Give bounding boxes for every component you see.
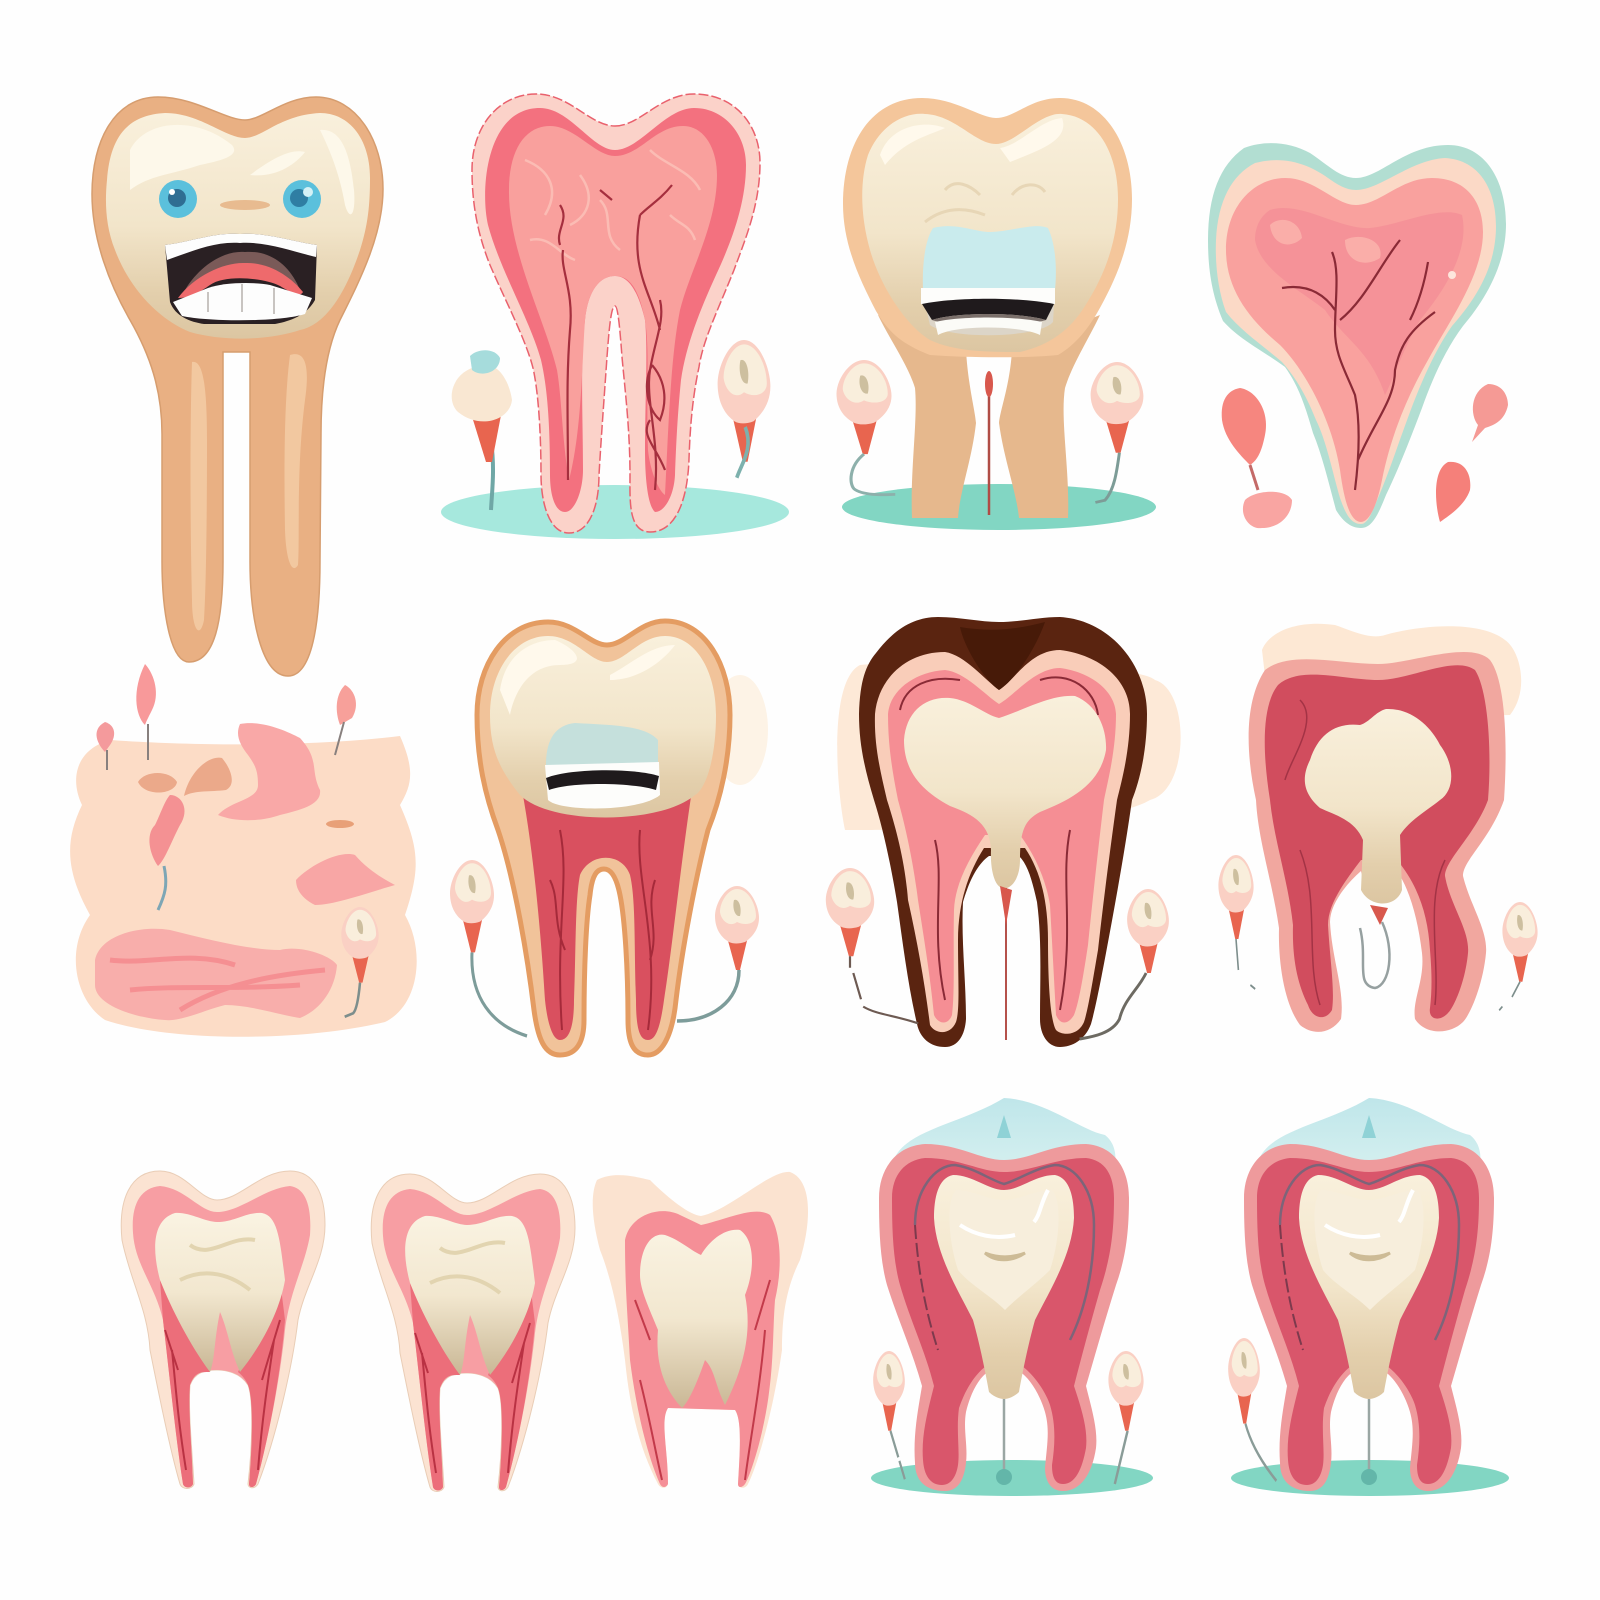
- centre root canal needle: [988, 375, 990, 515]
- veins: [559, 185, 672, 490]
- pink layer: [625, 1211, 780, 1487]
- pale outer layer: [593, 1172, 808, 1488]
- tooth body: [879, 1098, 1129, 1491]
- right mini tooth: [1499, 902, 1538, 1010]
- crown enamel: [862, 114, 1118, 352]
- left mini tooth: [873, 1351, 905, 1479]
- ice patch: [546, 723, 658, 770]
- cream core: [1305, 709, 1451, 904]
- tooth outline: [477, 621, 730, 1055]
- mottled tissue: [525, 150, 700, 260]
- left mini tooth with cap: [452, 350, 512, 510]
- tooth 1: surprised cartoon tooth with long roots: [92, 97, 383, 676]
- veins: [1282, 240, 1435, 490]
- top pin left: [96, 722, 114, 770]
- cream core: [640, 1230, 752, 1408]
- right mini tooth: [1091, 362, 1143, 502]
- right eye: [283, 180, 321, 218]
- large pink tissue: [95, 929, 337, 1020]
- brown outer shell: [859, 617, 1147, 1047]
- ground ellipse: [1231, 1460, 1509, 1496]
- pale crown backdrop: [1262, 624, 1521, 720]
- small pink blob top left: [1222, 388, 1266, 465]
- mouth: [921, 288, 1055, 335]
- cream pulp: [904, 696, 1106, 888]
- right pink tissue: [296, 854, 395, 905]
- red dentine band: [485, 108, 746, 512]
- crown fold lines: [925, 184, 1045, 222]
- blob top right: [1472, 384, 1508, 442]
- left mini tooth: [836, 360, 895, 495]
- top pin middle: [136, 664, 156, 760]
- ice patch: [923, 226, 1056, 290]
- white speck: [1448, 271, 1456, 279]
- ground ellipse: [871, 1460, 1153, 1496]
- darker inner tissue: [1255, 208, 1464, 395]
- left mini tooth: [1228, 1338, 1276, 1481]
- roots: [878, 315, 1100, 518]
- teal outer layer: [1208, 143, 1506, 528]
- peach backdrop: [837, 662, 1181, 830]
- mottled tissue: [1270, 220, 1381, 263]
- peach layer: [1216, 158, 1496, 524]
- pink outer layer: [1249, 652, 1506, 1032]
- pink pulp: [1226, 178, 1483, 522]
- tooth 7: brown outlined tooth with cream pulp: [826, 617, 1181, 1047]
- tooth 12: red tooth with ice cap and teal ground: [871, 1098, 1153, 1496]
- tissue stripes: [110, 958, 325, 1010]
- faint halo: [712, 675, 768, 785]
- right mini tooth with decay: [718, 340, 770, 478]
- tooth 2: pink cross-section with veins on teal ground: [441, 94, 789, 539]
- veins: [1285, 700, 1445, 1005]
- tooth 6: tooth with small mouth and red pulp roots: [450, 621, 768, 1055]
- red pulp: [1265, 665, 1489, 1019]
- right mini tooth: [677, 886, 759, 1021]
- bottom tooth A: [121, 1171, 325, 1488]
- top pin right: [335, 685, 356, 755]
- dark crown patch: [960, 622, 1045, 690]
- top pink tissue: [218, 723, 320, 820]
- red root pulp: [522, 790, 692, 1040]
- root highlights: [190, 354, 307, 630]
- veins: [635, 1280, 770, 1480]
- crown shine: [500, 640, 675, 715]
- crown outline: [843, 98, 1132, 357]
- bottom tooth C: [593, 1172, 808, 1488]
- nose: [220, 200, 270, 210]
- left mini tooth: [450, 860, 527, 1036]
- root tip with looped wire: [1360, 905, 1389, 988]
- crown enamel: [490, 636, 716, 818]
- mouth: [545, 762, 660, 808]
- bottom tooth B: [371, 1174, 575, 1492]
- ground ellipse: [441, 485, 789, 539]
- peach layer: [875, 650, 1130, 1034]
- outer enamel layer: [472, 94, 760, 533]
- pink pulp: [888, 668, 1116, 1023]
- crown shine: [880, 118, 1063, 165]
- panel 5: peach tissue patch with pink blobs: [70, 664, 417, 1037]
- tooth 13: second red tooth with ice cap and teal ground: [1228, 1098, 1509, 1496]
- centre needle: [1005, 888, 1007, 1040]
- brown pebbles: [138, 758, 232, 796]
- right mini tooth: [1080, 889, 1169, 1039]
- tooth body: [1244, 1098, 1494, 1491]
- mouth: [165, 234, 317, 324]
- pink pulp: [509, 126, 717, 495]
- ground ellipse: [842, 484, 1156, 530]
- left eye: [159, 180, 197, 218]
- tooth 3: tooth with open mouth and blue crown patch on teal ground: [836, 98, 1156, 530]
- blob stem: [1250, 465, 1258, 490]
- tooth 4: heart shaped pulp section: [1208, 143, 1508, 528]
- blob bottom right: [1436, 462, 1470, 522]
- crown enamel: [106, 113, 370, 339]
- tooth outline: [92, 97, 383, 676]
- peach background patch: [70, 736, 417, 1037]
- orange dash: [326, 820, 354, 828]
- small pink blob bottom left: [1243, 492, 1292, 528]
- veins: [900, 677, 1098, 1010]
- root vein lines: [550, 830, 655, 1030]
- crown shine: [130, 125, 354, 214]
- right mini tooth: [1108, 1351, 1144, 1484]
- left mini tooth: [826, 868, 918, 1023]
- tooth 8: red pulp tooth with cream core: [1218, 624, 1538, 1032]
- left mini tooth: [1218, 855, 1255, 989]
- pink blob with wire: [149, 795, 185, 910]
- bottom mini tooth on patch: [341, 907, 379, 1017]
